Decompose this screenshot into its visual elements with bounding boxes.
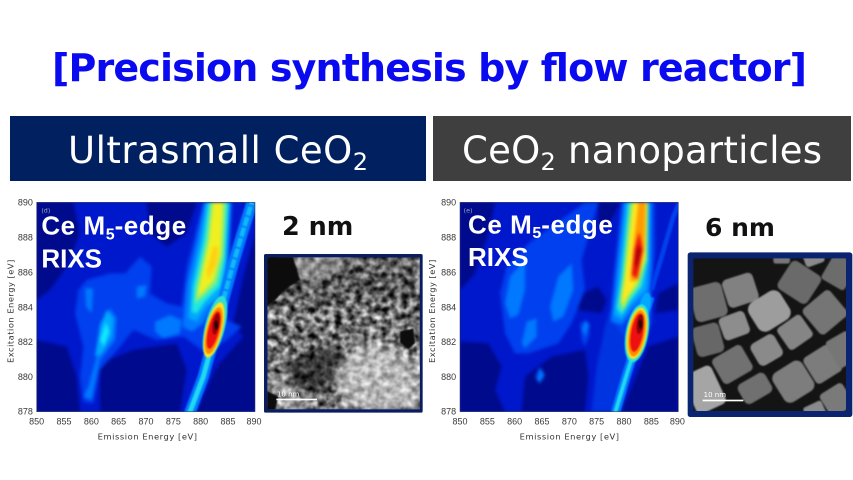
x axis labels bbox=[452, 417, 685, 442]
x axis labels: 890 bbox=[670, 417, 685, 427]
scale bar: 10 nm bbox=[703, 391, 743, 401]
y axis labels: 886 bbox=[18, 267, 33, 277]
banner: Ultrasmall CeO2: Ultrasmall CeO bbox=[68, 129, 353, 172]
scale bar: 10 nm: 10 nm bbox=[277, 390, 300, 398]
y axis labels: 878 bbox=[441, 407, 456, 417]
x axis labels: 880 bbox=[616, 417, 631, 427]
banner: CeO2 nanoparticles: 2 bbox=[540, 148, 556, 176]
y axis labels: 890 bbox=[18, 197, 33, 207]
y axis labels: 878 bbox=[18, 407, 33, 417]
overlay label: Ce M5-edge RIXS: RIXS bbox=[41, 243, 102, 273]
x axis labels: 885 bbox=[644, 417, 659, 427]
scale bar: 10 nm: 10 nm bbox=[704, 391, 726, 399]
title: [Precision synthesis by flow reactor] bbox=[52, 46, 807, 90]
x axis labels: 855 bbox=[56, 417, 71, 427]
y axis labels: 888 bbox=[441, 232, 456, 242]
TEM image: ultrasmall CeO2 bbox=[264, 254, 423, 413]
overlay label: Ce M5-edge RIXS: Ce M bbox=[468, 209, 532, 239]
x axis labels: 870 bbox=[562, 417, 577, 427]
y axis labels: 890 bbox=[441, 197, 456, 207]
overlay label: Ce M5-edge RIXS: -edge bbox=[115, 211, 187, 241]
y axis labels: 886 bbox=[441, 267, 456, 277]
y axis labels: 880 bbox=[18, 372, 33, 382]
y axis labels: 880 bbox=[441, 372, 456, 382]
x axis labels: Emission Energy [eV] bbox=[520, 432, 619, 442]
x axis labels: 885 bbox=[220, 417, 235, 427]
y axis labels: Excitation Energy [eV] bbox=[427, 260, 437, 363]
y axis labels bbox=[5, 197, 33, 417]
scale bar: 10 nm bbox=[276, 390, 317, 400]
banner: Ultrasmall CeO2: 2 bbox=[353, 148, 369, 176]
banner: Ultrasmall CeO2 bbox=[10, 116, 426, 181]
y axis labels: 888 bbox=[18, 232, 33, 242]
overlay label: Ce M5-edge RIXS: Ce M bbox=[41, 211, 106, 241]
chart: RIXS map, ultrasmall CeO2: (d) bbox=[41, 208, 50, 215]
overlay label: Ce M5-edge RIXS: RIXS bbox=[468, 242, 529, 272]
TEM image: CeO2 nanoparticles bbox=[688, 252, 852, 417]
label: 2 nm: 2 nm bbox=[282, 212, 353, 242]
overlay label: Ce M5-edge RIXS: -edge bbox=[541, 209, 613, 239]
x axis labels: 855 bbox=[480, 417, 495, 427]
x axis labels: 860 bbox=[84, 417, 99, 427]
x axis labels: Emission Energy [eV] bbox=[98, 432, 197, 442]
y axis labels bbox=[427, 197, 456, 417]
x axis labels: 865 bbox=[111, 417, 126, 427]
banner: CeO2 nanoparticles: CeO bbox=[462, 129, 540, 172]
chart: RIXS map, ultrasmall CeO2 bbox=[5, 197, 261, 442]
banner: CeO2 nanoparticles: nanoparticles bbox=[556, 129, 822, 172]
overlay label: Ce M5-edge RIXS: 5 bbox=[106, 226, 115, 243]
y axis labels: 884 bbox=[18, 302, 33, 312]
y axis labels: Excitation Energy [eV] bbox=[5, 260, 15, 363]
x axis labels: 860 bbox=[507, 417, 522, 427]
y axis labels: 882 bbox=[18, 337, 33, 347]
x axis labels: 880 bbox=[193, 417, 208, 427]
x axis labels: 870 bbox=[138, 417, 153, 427]
diagonal elastic line and peak bbox=[188, 198, 253, 417]
x axis labels: 890 bbox=[246, 417, 261, 427]
label: 6 nm: 6 nm bbox=[705, 213, 775, 242]
x axis labels: 875 bbox=[589, 417, 604, 427]
y axis labels: 884 bbox=[441, 302, 456, 312]
y axis labels: 882 bbox=[441, 337, 456, 347]
x axis labels bbox=[29, 417, 261, 442]
x axis labels: 850 bbox=[29, 417, 44, 427]
chart: RIXS map, CeO2 nanoparticles: (e) bbox=[464, 208, 473, 215]
overlay label: Ce M5-edge RIXS: 5 bbox=[532, 225, 541, 242]
x axis labels: 865 bbox=[534, 417, 549, 427]
chart: RIXS map, CeO2 nanoparticles bbox=[427, 197, 685, 442]
x axis labels: 850 bbox=[452, 417, 467, 427]
x axis labels: 875 bbox=[166, 417, 181, 427]
banner: CeO2 nanoparticles bbox=[433, 116, 851, 181]
